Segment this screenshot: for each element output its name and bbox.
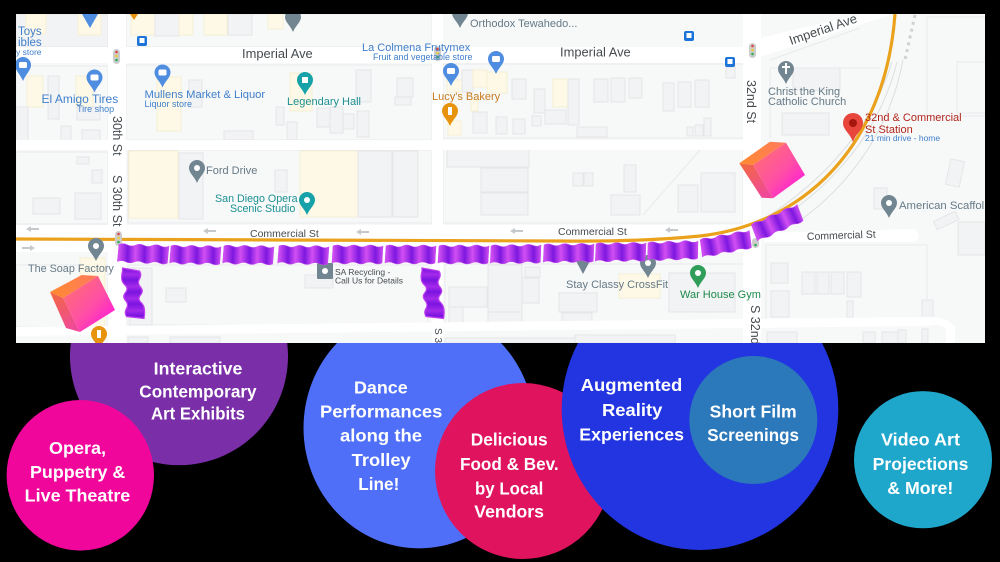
map labels: Commercial St bbox=[558, 226, 627, 238]
map labels: La Colmena Frutymex bbox=[362, 42, 471, 54]
map labels: SA Recycling - bbox=[335, 267, 390, 277]
map labels: Orthodox Tewahedo... bbox=[470, 18, 577, 30]
circle: Video Art Projections and More bbox=[854, 391, 992, 528]
map labels: The Soap Factory bbox=[28, 263, 114, 275]
circle: Delicious Food and Bev bbox=[435, 383, 611, 559]
circle: Delicious Food and Bev: by Local bbox=[475, 478, 543, 498]
map labels: 32nd St bbox=[744, 80, 758, 124]
roads bbox=[16, 14, 955, 343]
map labels: Toys bbox=[18, 26, 42, 38]
circle: Delicious Food and Bev: Delicious bbox=[471, 430, 548, 450]
map labels: ibles bbox=[18, 37, 42, 49]
map labels: S 3 bbox=[432, 328, 443, 343]
circle: Video Art Projections and More: & More! bbox=[887, 478, 953, 498]
map labels: St Station bbox=[865, 124, 913, 136]
map labels: Christ the King bbox=[768, 86, 840, 98]
circle: Dance Performances along the Trolley Line: Trolley bbox=[352, 450, 411, 470]
map labels: Commercial St bbox=[807, 229, 876, 243]
wave segments along the trolley line bbox=[117, 204, 804, 265]
map labels: El Amigo Tires bbox=[42, 92, 118, 106]
circle: Dance Performances along the Trolley Line: Dance bbox=[354, 377, 408, 397]
circle: Delicious Food and Bev: Vendors bbox=[474, 502, 544, 522]
map labels: Ford Drive bbox=[206, 165, 257, 177]
map labels: 21 min drive - home bbox=[865, 133, 940, 143]
map labels: Imperial Ave bbox=[242, 46, 313, 61]
circle: Short Film Screenings: Short Film bbox=[710, 401, 797, 421]
map labels: Tire shop bbox=[77, 104, 114, 114]
circle: Dance Performances along the Trolley Line: Performances bbox=[320, 401, 443, 421]
circle: Opera, Puppetry and Live Theatre: Opera, bbox=[49, 438, 106, 458]
city blocks and buildings bbox=[16, 14, 997, 343]
circle: Video Art Projections and More: Projections bbox=[873, 454, 969, 474]
circle: Short Film Screenings bbox=[689, 356, 817, 484]
map labels: Imperial Ave bbox=[560, 44, 631, 60]
map labels: 32nd & Commercial bbox=[865, 112, 962, 124]
circle: Augmented Reality Experiences: Augmented bbox=[581, 375, 682, 395]
map labels: S 30th St bbox=[110, 175, 124, 227]
circle: Dance Performances along the Trolley Line: Line! bbox=[358, 474, 399, 494]
circle: Dance Performances along the Trolley Line: along the bbox=[340, 426, 422, 446]
circle: Opera, Puppetry and Live Theatre bbox=[7, 400, 154, 551]
map labels: Imperial Ave bbox=[787, 11, 859, 48]
map labels: War House Gym bbox=[680, 289, 761, 301]
circle: Opera, Puppetry and Live Theatre: Puppetry & bbox=[30, 462, 126, 482]
map pins bbox=[15, 5, 897, 349]
circle: Augmented Reality Experiences: Reality bbox=[602, 400, 663, 420]
circle: Delicious Food and Bev: Food & Bev. bbox=[460, 454, 559, 474]
cube marker: east bbox=[739, 142, 805, 198]
rail corridor lines bbox=[770, 15, 915, 222]
map labels: Fruit and vegetable store bbox=[373, 52, 473, 62]
circle: Augmented Reality Experiences bbox=[562, 343, 838, 550]
transit icons bbox=[137, 31, 735, 67]
map labels: Stay Classy CrossFit bbox=[566, 279, 668, 291]
station pin bbox=[843, 113, 863, 142]
circle: Dance Performances along the Trolley Line bbox=[304, 343, 534, 548]
map labels: 30th St bbox=[110, 116, 124, 156]
trolley line bbox=[16, 14, 895, 241]
circle: Interactive Contemporary Art Exhibits: Art Exhibits bbox=[151, 403, 245, 423]
map labels: American Scaffol bbox=[899, 200, 984, 212]
map labels: Catholic Church bbox=[768, 96, 846, 108]
circle: Interactive Contemporary Art Exhibits: Interactive bbox=[154, 358, 243, 378]
map labels: Legendary Hall bbox=[287, 96, 361, 108]
circle: Short Film Screenings: Screenings bbox=[707, 425, 799, 445]
circle: Interactive Contemporary Art Exhibits: Contemporary bbox=[139, 381, 257, 401]
circle: Interactive Contemporary Art Exhibits bbox=[70, 343, 288, 465]
circle: Augmented Reality Experiences: Experiences bbox=[579, 425, 684, 445]
map labels: y store bbox=[16, 47, 42, 57]
road one-way arrows bbox=[22, 226, 678, 251]
cube marker: west bbox=[50, 275, 115, 332]
map labels: Commercial St bbox=[250, 228, 319, 240]
map labels bbox=[16, 11, 984, 345]
map labels: Mullens Market & Liquor bbox=[144, 89, 265, 101]
map labels: San Diego Opera bbox=[215, 193, 298, 205]
map labels: S 32nd bbox=[748, 305, 762, 345]
traffic lights bbox=[113, 43, 759, 248]
map labels: Liquor store bbox=[144, 99, 192, 109]
wave segments on cross streets bbox=[122, 268, 444, 318]
map labels: Lucy's Bakery bbox=[432, 91, 501, 103]
panel: street map bbox=[15, 5, 997, 349]
map labels: Scenic Studio bbox=[230, 203, 295, 215]
map labels: Call Us for Details bbox=[335, 276, 403, 286]
circle: Video Art Projections and More: Video Art bbox=[881, 430, 960, 450]
circle: Opera, Puppetry and Live Theatre: Live Theatre bbox=[25, 486, 131, 506]
